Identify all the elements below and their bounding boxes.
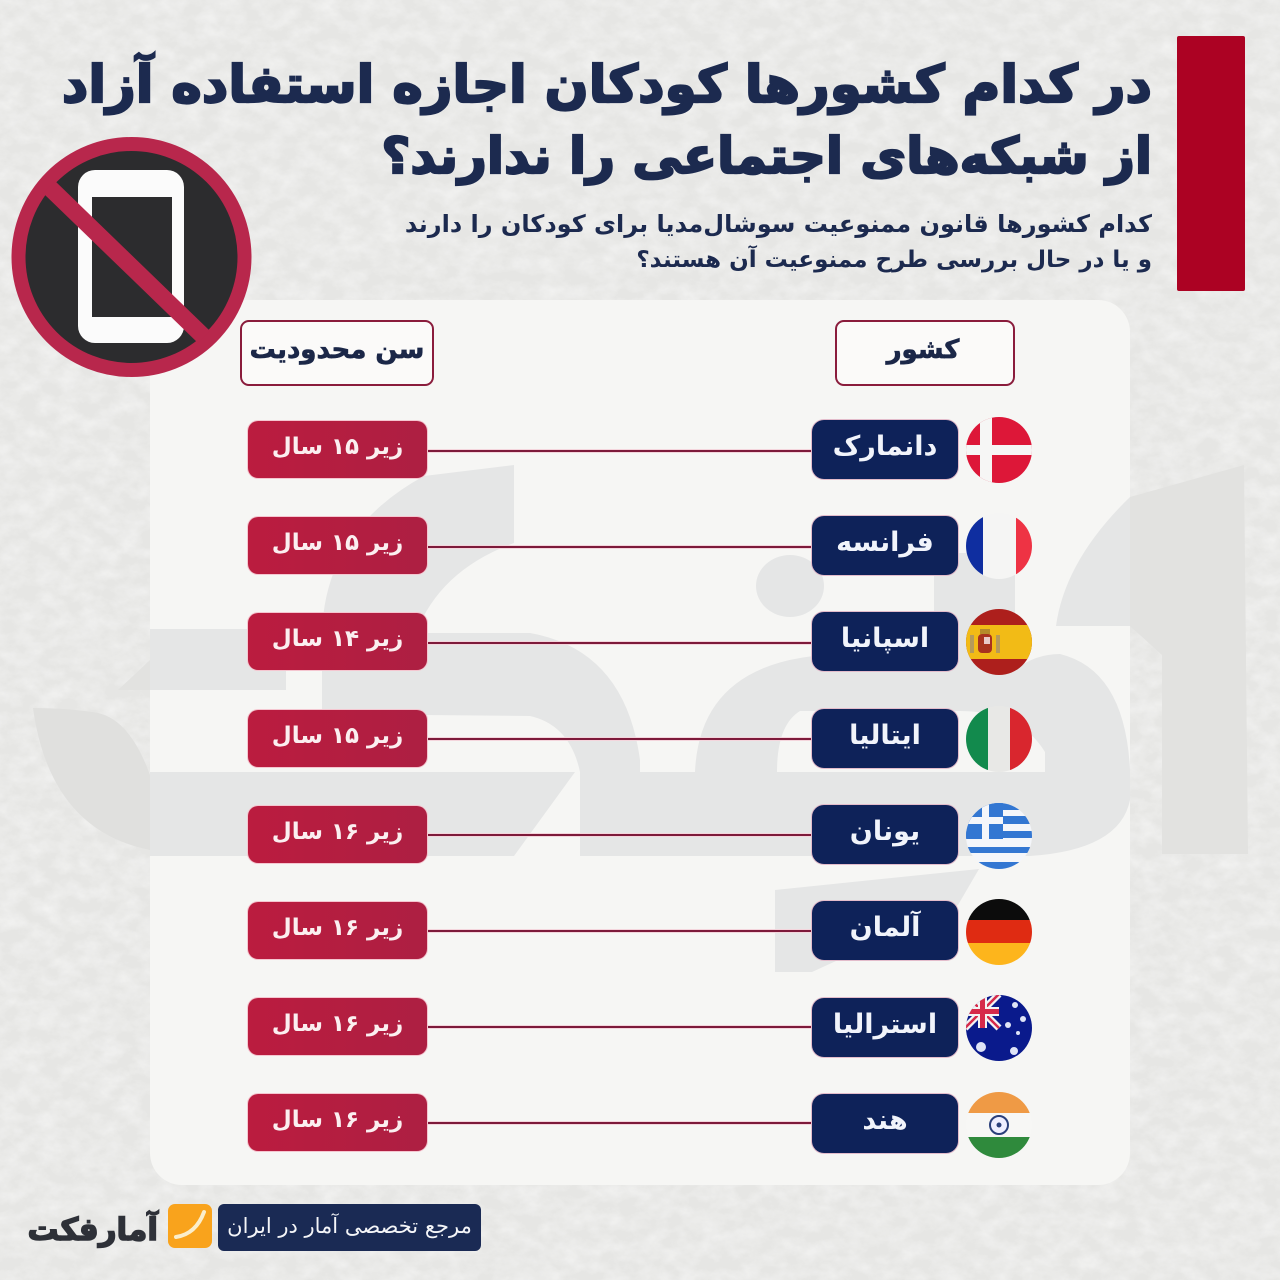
row: Denmark name: دانمارک <box>833 431 937 462</box>
row: India age <box>248 1094 427 1151</box>
row: Greece name: یونان <box>850 816 920 847</box>
connector lines <box>427 450 812 452</box>
flag: Spain <box>966 609 1032 675</box>
row: Australia name <box>812 998 958 1057</box>
title line 1: در کدام کشورها کودکان اجازه استفاده آزاد <box>62 55 1152 115</box>
header: country <box>835 320 1015 386</box>
flag: Italy <box>966 708 1032 772</box>
row: France name <box>812 516 958 575</box>
row: Germany name: آلمان <box>850 912 920 943</box>
accent bar <box>1177 36 1245 291</box>
icon: no phone <box>12 137 252 377</box>
row: Australia age <box>248 998 427 1055</box>
flag: Australia <box>966 995 1032 1061</box>
row: Germany age <box>248 902 427 959</box>
header: age limit <box>240 320 434 386</box>
row: Australia age: زیر ۱۶ سال <box>272 1011 403 1037</box>
header: country: کشور <box>887 335 959 365</box>
title <box>62 50 1152 186</box>
watermark logo <box>150 465 1130 972</box>
row: India name: هند <box>862 1105 908 1136</box>
row: Greece name <box>812 805 958 864</box>
row: India name <box>812 1094 958 1153</box>
row: Italy name: ایتالیا <box>849 720 921 751</box>
row: Denmark age <box>248 421 427 478</box>
tagline badge <box>218 1204 481 1251</box>
row: Spain age <box>248 613 427 670</box>
row: Denmark age: زیر ۱۵ سال <box>272 434 403 460</box>
tagline badge: مرجع تخصصی آمار در ایران <box>227 1214 472 1238</box>
icon: logo mark <box>168 1204 212 1248</box>
row: Italy age: زیر ۱۵ سال <box>272 723 403 749</box>
panel: main table background <box>150 300 1130 1185</box>
row: Spain name: اسپانیا <box>841 623 929 654</box>
title line 2: از شبکه‌های اجتماعی را ندارند؟ <box>381 127 1152 185</box>
row: Greece age: زیر ۱۶ سال <box>272 819 403 845</box>
flag: France <box>966 517 1032 579</box>
row: Germany name <box>812 901 958 960</box>
row: Denmark name <box>812 420 958 479</box>
subtitle line 2: و یا در حال بررسی طرح ممنوعیت آن هستند؟ <box>636 247 1152 273</box>
row: France age: زیر ۱۵ سال <box>272 530 403 556</box>
header: age limit: سن محدودیت <box>250 335 424 365</box>
flag: India <box>968 1092 1030 1158</box>
row: Greece age <box>248 806 427 863</box>
subtitle <box>405 210 1152 273</box>
row: Australia name: استرالیا <box>833 1009 937 1040</box>
row: Germany age: زیر ۱۶ سال <box>272 915 403 941</box>
flag: Greece <box>966 803 1032 869</box>
row: France name: فرانسه <box>836 527 934 558</box>
logo wordmark: آمارفکت <box>28 1212 158 1248</box>
row: Italy name <box>812 709 958 768</box>
row: India age: زیر ۱۶ سال <box>272 1107 403 1133</box>
row: Spain age: زیر ۱۴ سال <box>272 626 403 652</box>
row: France age <box>248 517 427 574</box>
flag: Germany <box>966 899 1032 965</box>
row: Italy age <box>248 710 427 767</box>
row: Spain name <box>812 612 958 671</box>
flag: Denmark <box>966 417 1032 483</box>
subtitle line 1: کدام کشورها قانون ممنوعیت سوشال‌مدیا برای کودکان را دارند <box>405 210 1152 238</box>
